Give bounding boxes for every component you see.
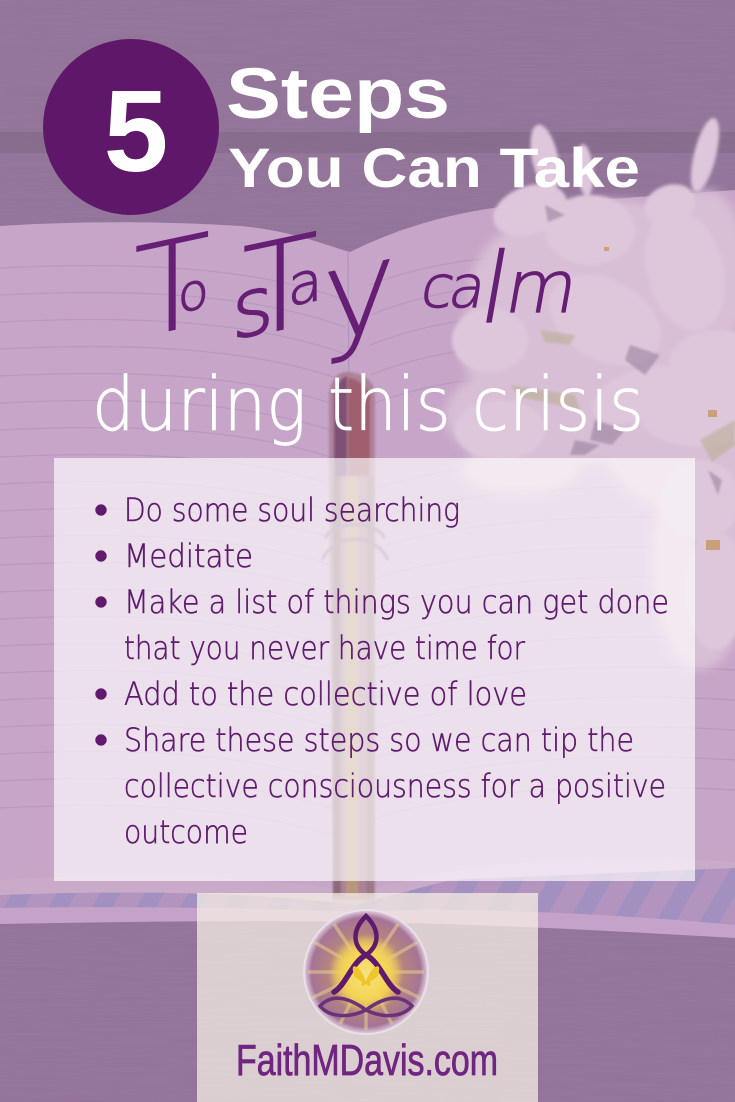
step 3: Make a list of things you can get done — [124, 583, 669, 621]
step 5: collective consciousness for a positive — [124, 767, 666, 805]
website name: FaithMDavis.com — [236, 1036, 498, 1085]
step 5: outcome — [124, 813, 248, 851]
script heading: To stay calm: l — [472, 233, 519, 346]
step 5: Share these steps so we can tip the — [124, 721, 634, 759]
panel: logo and website — [197, 893, 538, 1102]
title: You Can Take: You Can Take — [228, 136, 640, 199]
script heading: To stay calm: y — [322, 211, 396, 372]
script heading: To stay calm: a — [444, 253, 492, 321]
purple circle badge with number 5 — [43, 39, 219, 215]
script heading: To stay calm — [134, 190, 587, 391]
background: white flowers — [445, 115, 735, 670]
background: open notebook — [0, 190, 735, 938]
script heading: To stay calm: T — [134, 206, 210, 368]
script heading: To stay calm: s — [232, 257, 274, 359]
title: Steps: Steps — [226, 55, 450, 134]
step 3: that you never have time for — [124, 629, 526, 667]
background: pen — [322, 372, 388, 900]
subtitle: during this crisis: during this crisis — [92, 362, 644, 448]
panel: steps list — [54, 458, 695, 881]
step 5 — [96, 721, 666, 851]
script heading: To stay calm: T — [242, 206, 318, 368]
icon: meditating figure logo — [304, 910, 428, 1034]
script heading: To stay calm: m — [500, 247, 584, 330]
step 1: Do some soul searching — [124, 491, 460, 529]
icon: butterfly — [353, 966, 379, 986]
step 2: Meditate — [124, 537, 253, 575]
step 4: Add to the collective of love — [124, 675, 527, 713]
script heading: To stay calm: a — [288, 248, 322, 320]
number 5: 5 — [104, 66, 168, 196]
step 3 — [96, 583, 669, 667]
script heading: To stay calm: c — [416, 253, 460, 321]
script heading: To stay calm: o — [178, 260, 209, 325]
